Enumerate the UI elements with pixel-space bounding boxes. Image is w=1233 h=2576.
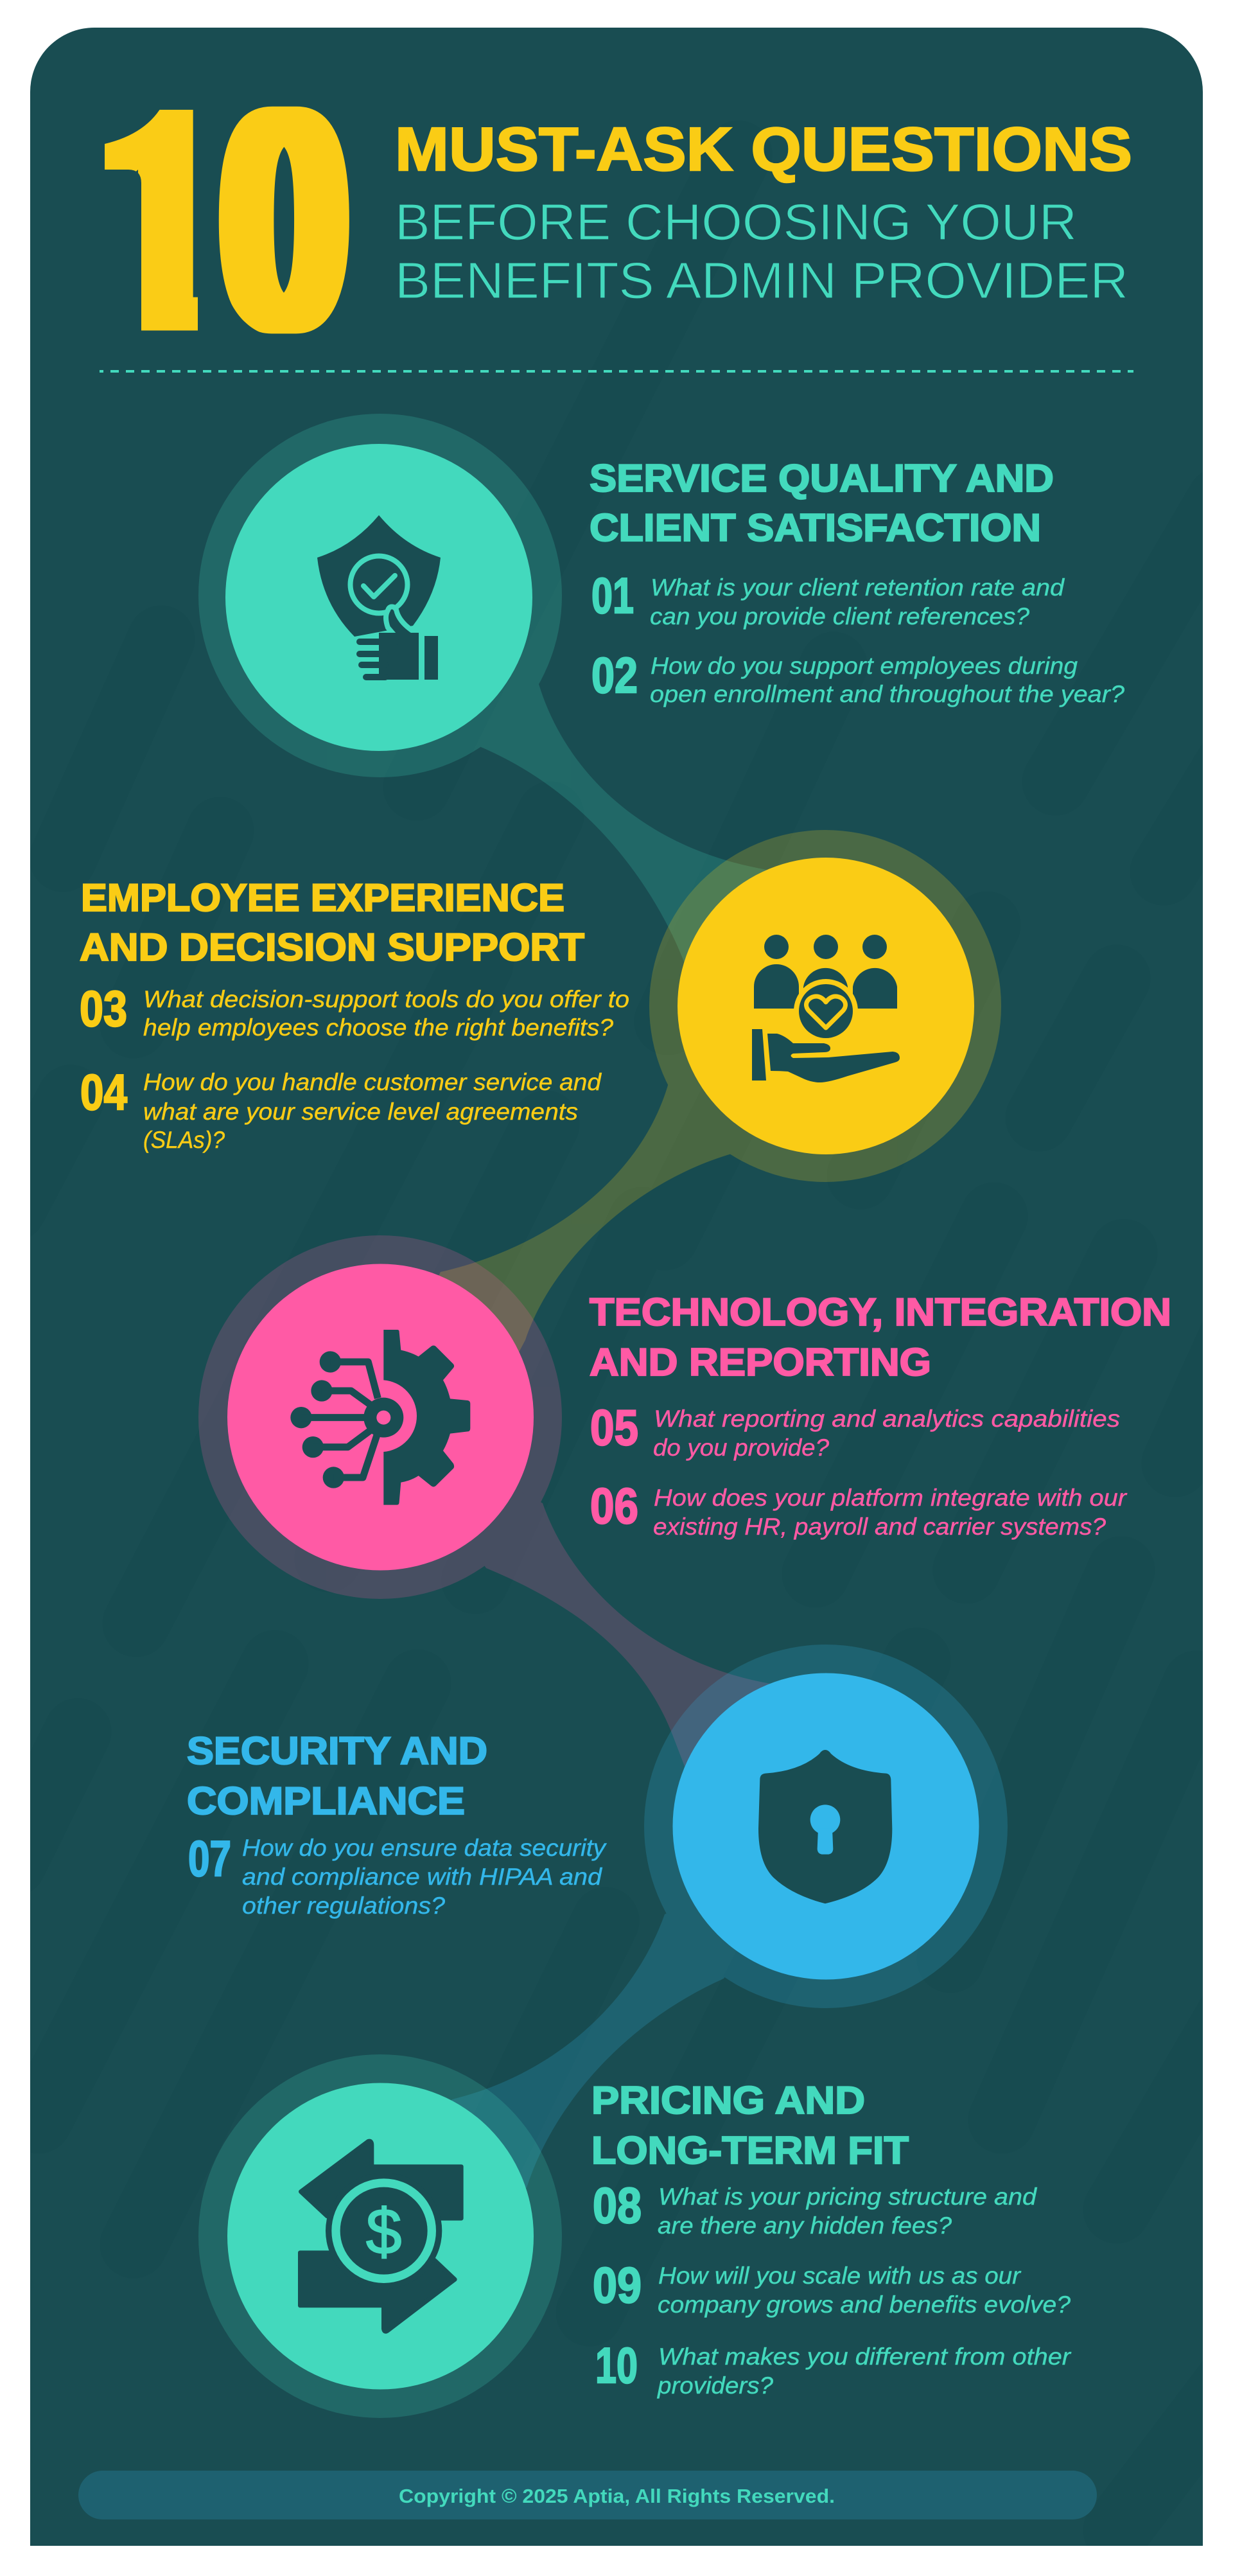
question 02 bbox=[650, 653, 1124, 707]
question 08 bbox=[658, 2183, 1038, 2239]
question 09: company grows and benefits evolve? bbox=[658, 2291, 1071, 2318]
number 02: 02 bbox=[591, 647, 638, 703]
heading: SECURITY AND bbox=[187, 1729, 487, 1772]
number 04: 04 bbox=[80, 1064, 127, 1120]
question 09 bbox=[658, 2263, 1071, 2318]
question 04: (SLAs)? bbox=[143, 1127, 225, 1153]
question 10 bbox=[657, 2343, 1072, 2399]
question 08: What is your pricing structure and bbox=[658, 2183, 1038, 2210]
ring and connector: yellow, circle 2 to circle 3 bbox=[417, 830, 1001, 1362]
copyright: Copyright © 2025 Aptia, All Rights Reserved. bbox=[399, 2485, 835, 2507]
question 03: What decision-support tools do you offer to bbox=[143, 986, 629, 1012]
question 06: existing HR, payroll and carrier systems? bbox=[653, 1513, 1106, 1540]
section 1: service quality bbox=[590, 457, 1124, 707]
question 03 bbox=[143, 986, 629, 1041]
heading: SERVICE QUALITY AND bbox=[590, 457, 1054, 500]
question 10: What makes you different from other bbox=[658, 2343, 1072, 2370]
question 06 bbox=[653, 1485, 1128, 1540]
section 5: pricing bbox=[591, 2079, 1072, 2399]
title line: must-ask questions: MUST-ASK QUESTIONS bbox=[395, 115, 1132, 184]
number 09: 09 bbox=[593, 2257, 642, 2313]
question 07: How do you ensure data security bbox=[242, 1835, 608, 1861]
subtitle line 2: BENEFITS ADMIN PROVIDER bbox=[395, 252, 1128, 309]
icon: people, heart and hand bbox=[752, 935, 900, 1082]
question 01: What is your client retention rate and bbox=[651, 574, 1065, 601]
ring and connector: blue, circle 4 to circle 5 bbox=[411, 1645, 1008, 2188]
section 4: security bbox=[187, 1729, 608, 1919]
question 07: and compliance with HIPAA and bbox=[242, 1864, 603, 1890]
number 05: 05 bbox=[590, 1399, 638, 1456]
question 07 bbox=[242, 1835, 608, 1919]
section 2: employee experience bbox=[80, 876, 629, 1153]
number 08: 08 bbox=[593, 2177, 642, 2234]
heading line 2: COMPLIANCE bbox=[187, 1779, 465, 1822]
heading line 2: CLIENT SATISFACTION bbox=[590, 506, 1041, 549]
circle 2 bbox=[678, 858, 974, 1154]
ring: teal, circle 5 bbox=[198, 2054, 562, 2418]
question 02: How do you support employees during bbox=[651, 653, 1078, 679]
question 05 bbox=[653, 1406, 1120, 1461]
number 01: 01 bbox=[591, 567, 634, 624]
circle 1 bbox=[225, 444, 532, 751]
footer bar bbox=[78, 2471, 1097, 2519]
circle 3 bbox=[227, 1264, 534, 1570]
question 02: open enrollment and throughout the year? bbox=[650, 681, 1124, 707]
heading: PRICING AND bbox=[591, 2079, 865, 2122]
ring and connector: pink, circle 3 to circle 4 bbox=[198, 1235, 771, 1773]
heading line 2: LONG-TERM FIT bbox=[591, 2129, 909, 2172]
question 05: do you provide? bbox=[653, 1434, 829, 1461]
ring and connector: teal, circle 1 to circle 2 bbox=[198, 414, 767, 970]
question 04 bbox=[143, 1069, 602, 1153]
number 10: 10 bbox=[595, 2337, 638, 2394]
icon: dollar with exchange arrows: $ bbox=[366, 2196, 401, 2268]
icon: dollar with exchange arrows bbox=[300, 2141, 461, 2331]
question 06: How does your platform integrate with our bbox=[654, 1485, 1128, 1511]
question 03: help employees choose the right benefits? bbox=[143, 1014, 613, 1041]
icon: shield with thumbs up bbox=[317, 515, 441, 682]
icon: shield with keyhole bbox=[758, 1750, 892, 1903]
heading line 2: AND DECISION SUPPORT bbox=[80, 926, 584, 969]
question 04: How do you handle customer service and bbox=[143, 1069, 602, 1095]
question 01: can you provide client references? bbox=[650, 603, 1029, 630]
section 3: technology bbox=[590, 1291, 1171, 1540]
header bbox=[105, 107, 1130, 334]
number 07: 07 bbox=[188, 1830, 231, 1887]
question 09: How will you scale with us as our bbox=[658, 2263, 1022, 2289]
subtitle line 1: BEFORE CHOOSING YOUR bbox=[395, 193, 1077, 251]
circle 4 bbox=[673, 1673, 979, 1980]
big number 10: 10 bbox=[98, 40, 346, 398]
question 10: providers? bbox=[657, 2372, 773, 2399]
heading line 2: AND REPORTING bbox=[590, 1341, 931, 1384]
question 04: what are your service level agreements bbox=[143, 1098, 578, 1125]
heading: EMPLOYEE EXPERIENCE bbox=[81, 876, 564, 919]
question 07: other regulations? bbox=[242, 1892, 445, 1919]
icon: half gear with circuit bbox=[290, 1330, 470, 1505]
question 01 bbox=[650, 574, 1065, 630]
circle 5 bbox=[227, 2083, 534, 2390]
number 03: 03 bbox=[80, 980, 127, 1037]
heading: TECHNOLOGY, INTEGRATION bbox=[590, 1291, 1171, 1334]
number 06: 06 bbox=[590, 1478, 638, 1534]
question 08: are there any hidden fees? bbox=[658, 2212, 952, 2239]
question 05: What reporting and analytics capabilities bbox=[654, 1406, 1120, 1432]
